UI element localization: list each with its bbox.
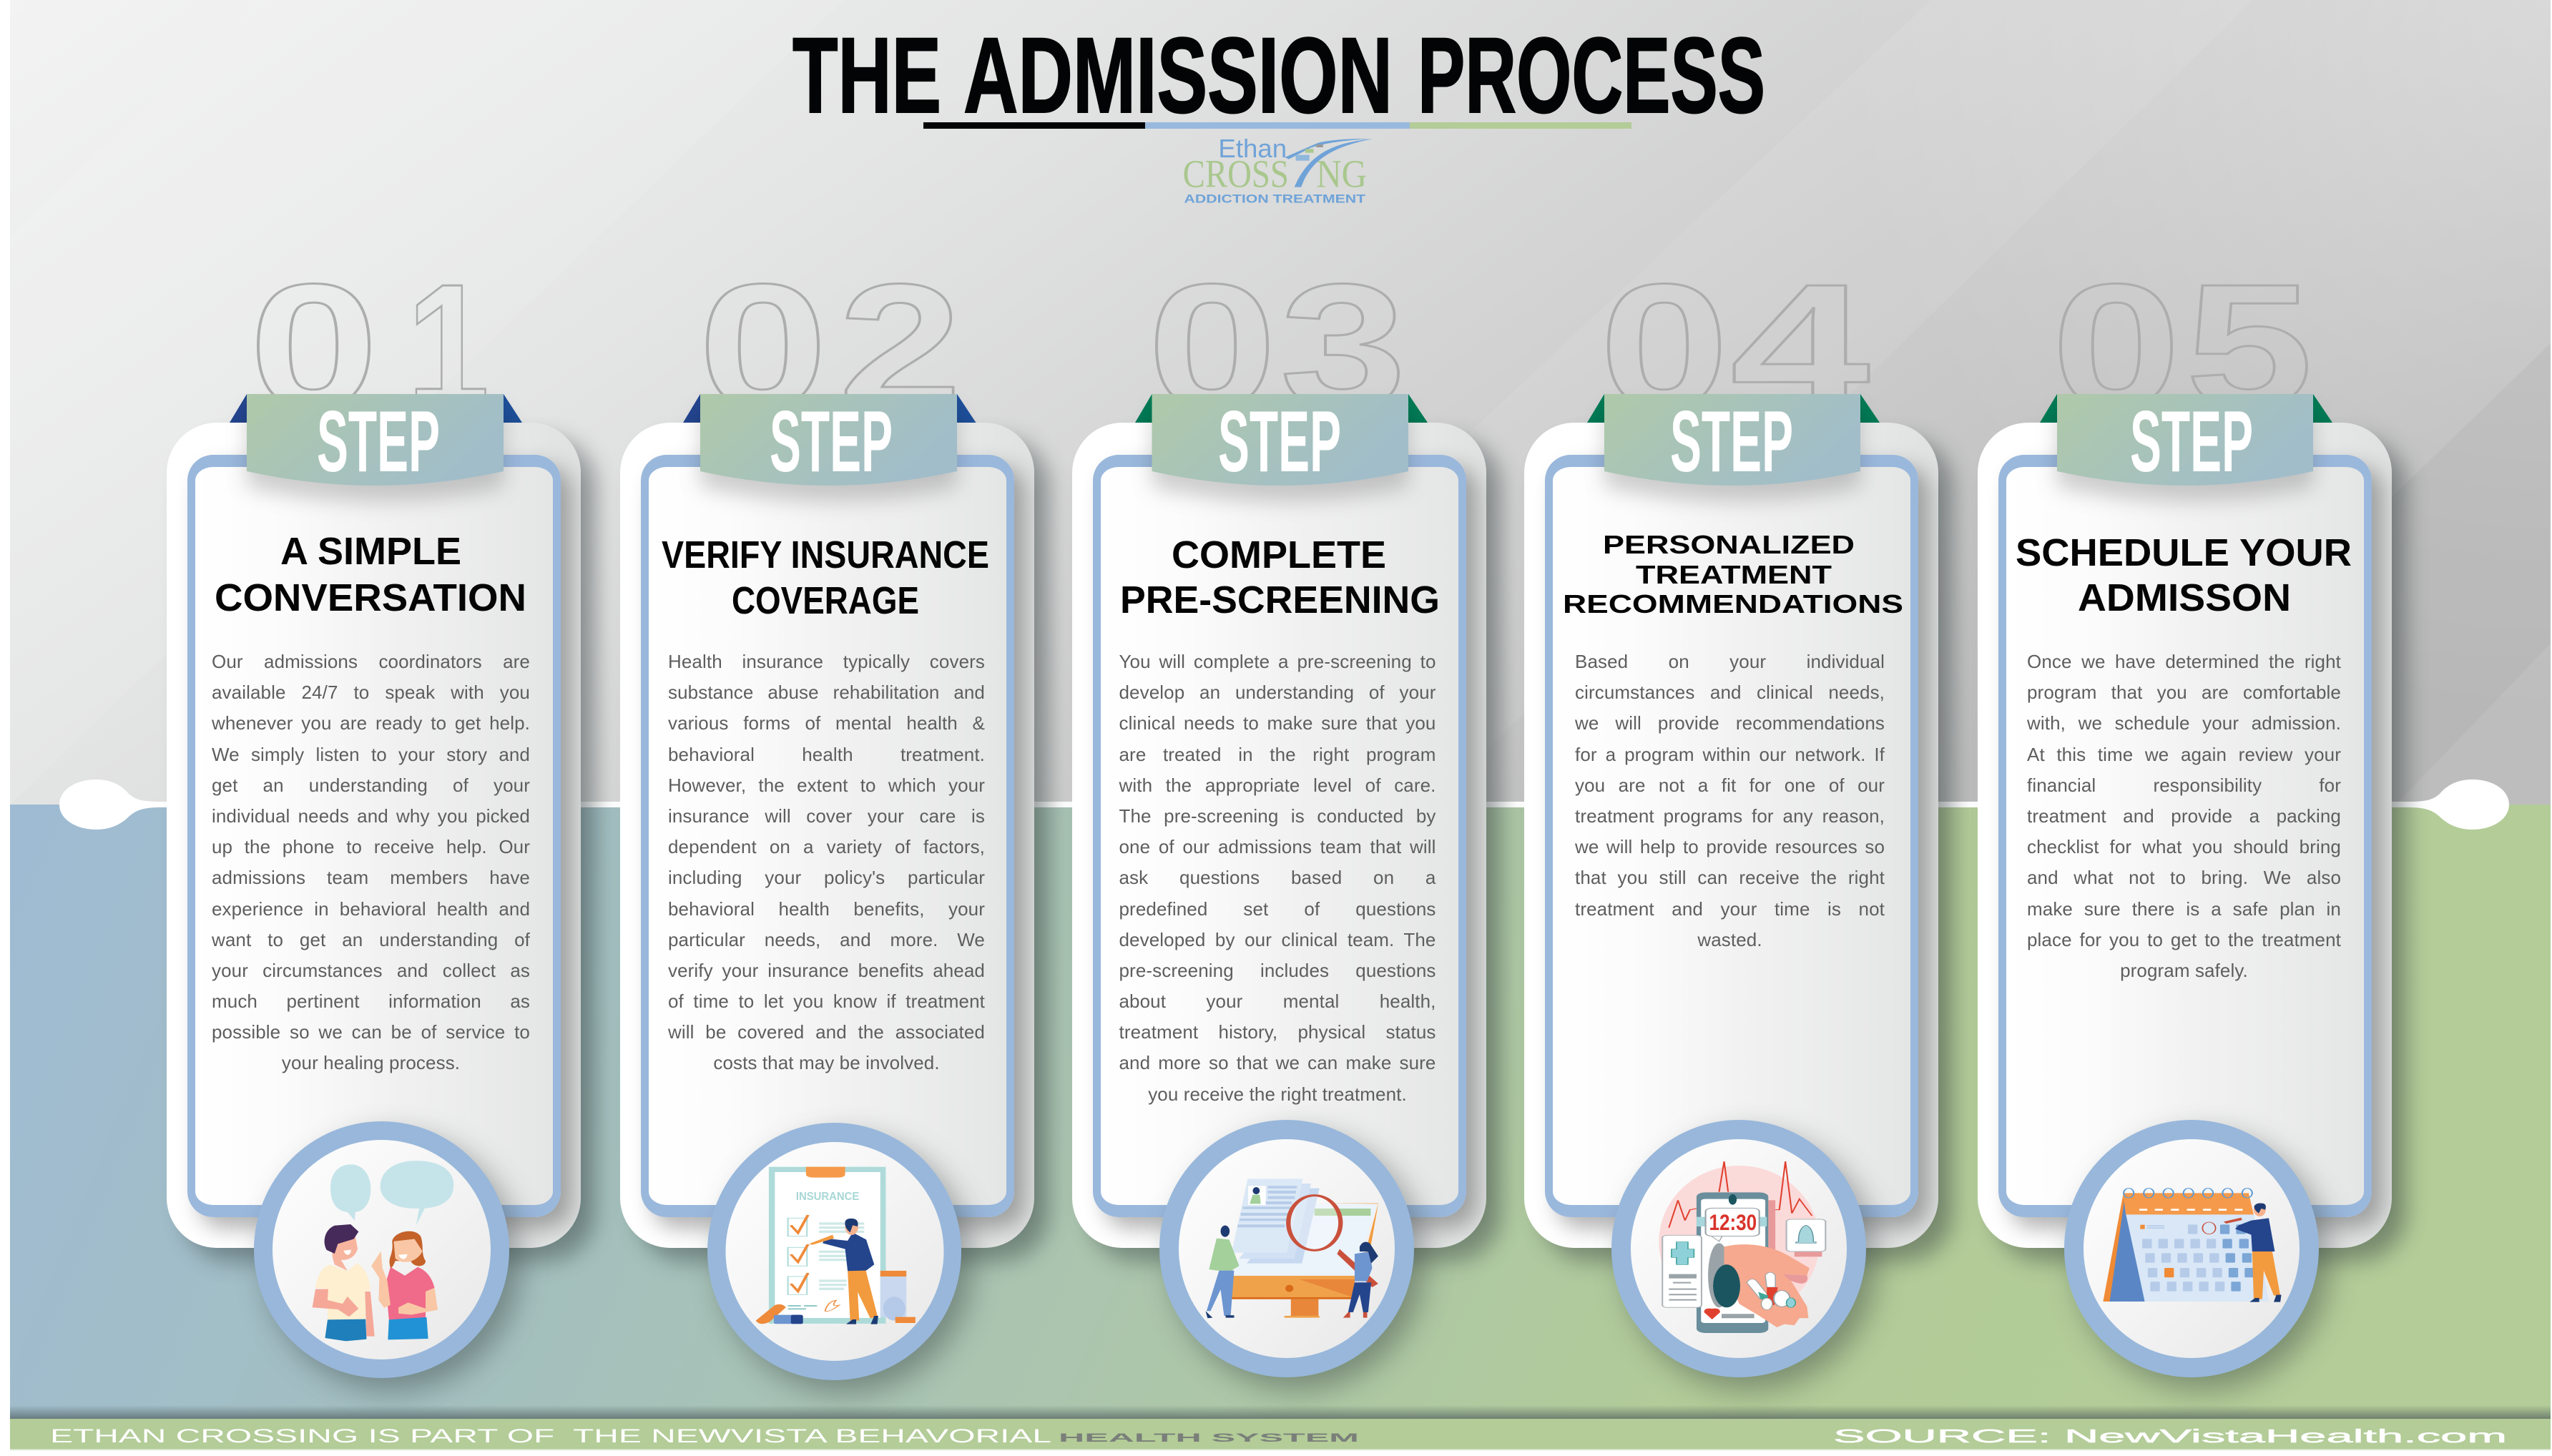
body text: verify your insurance benefits ahead [668, 960, 985, 981]
body text: your circumstances and collect as [212, 960, 530, 981]
ribbon, heading and illustration: COVERAGE [732, 579, 919, 622]
body text: various forms of mental health & [668, 712, 985, 734]
body text: individual needs and why you picked [212, 805, 530, 827]
ribbon, heading and illustration: SCHEDULE YOUR [2016, 531, 2352, 574]
panel: step 2 [620, 247, 1063, 1407]
ribbon, heading and illustration: STEP [1670, 393, 1793, 490]
title [792, 15, 1765, 135]
body text: financial responsibility for [2027, 774, 2341, 796]
footer bar [0, 1419, 2552, 1456]
ribbon, heading and illustration: CONVERSATION [215, 576, 526, 619]
ribbon, heading and illustration: RECOMMENDATIONS [1563, 589, 1903, 619]
body text: treatment and provide a packing [2027, 805, 2341, 827]
ribbon, heading and illustration: PERSONALIZED [1603, 530, 1855, 559]
large outlined number 04 with ribbon wings: 0 [1599, 247, 1729, 445]
large outlined number 03 with ribbon wings: 3 [1280, 247, 1407, 445]
card with blue frame [167, 423, 581, 1248]
body text: place for you to get to the treatment [2027, 929, 2341, 950]
body text [668, 651, 985, 1073]
body text: However, the extent to which your [668, 774, 985, 796]
title underline tricolour [923, 122, 1631, 129]
title: THE [792, 15, 941, 135]
ribbon, heading and illustration: COMPLETE [1172, 533, 1386, 576]
body text: pre-screening includes questions [1119, 960, 1436, 981]
body text: developed by our clinical team. The [1119, 929, 1436, 950]
body text: ask questions based on a [1119, 867, 1436, 888]
large outlined number 03 with ribbon wings [1135, 247, 1428, 445]
title: ADMISSION [963, 15, 1393, 135]
body text: whenever you are ready to get help. [212, 712, 530, 734]
body text: predefined set of questions [1119, 898, 1436, 920]
ribbon, heading and illustration: STEP [2130, 393, 2253, 490]
body text: Based on your individual [1575, 651, 1885, 672]
body text: with the appropriate level of care. [1119, 774, 1436, 796]
panel: step 1 [167, 247, 609, 1406]
body text: develop an understanding of your [1119, 682, 1436, 703]
footer bar: SOURCE: NewVistaHealth.com [1833, 1425, 2507, 1447]
body text: You will complete a pre-screening to [1119, 651, 1436, 672]
body text: behavioral health treatment. [668, 744, 985, 765]
body text: are treated in the right program [1119, 744, 1436, 765]
large outlined number 02 with ribbon wings: 0 [698, 247, 828, 445]
panel: step 5 [1978, 272, 2392, 1387]
body text: program that you are comfortable [2027, 682, 2341, 703]
card with blue frame [1524, 423, 1938, 1248]
ribbon, heading and illustration [662, 393, 989, 1407]
ribbon, heading and illustration: INSURANCE [796, 1189, 859, 1203]
body text: Our admissions coordinators are [212, 651, 530, 672]
body text: The pre-screening is conducted by [1119, 805, 1436, 827]
body text: treatment history, physical status [1119, 1021, 1436, 1043]
body text [1119, 651, 1436, 1105]
large outlined number 02 with ribbon wings [683, 247, 976, 445]
footer bar: ETHAN CROSSING IS PART OF THE NEWVISTA BEHAVORIAL [50, 1425, 1051, 1447]
body text: particular needs, and more. We [668, 929, 985, 950]
large outlined number 04 with ribbon wings [1587, 247, 1880, 445]
body text: program safely. [2120, 960, 2248, 981]
body text: behavioral health benefits, your [668, 898, 985, 920]
body text: one of our admissions team that will [1119, 836, 1436, 857]
body text: your healing process. [282, 1052, 460, 1073]
body text: and more so that we can make sure [1119, 1052, 1436, 1073]
body text: about your mental health, [1119, 990, 1436, 1012]
logo: Ethan Crossing Addiction Treatment [1183, 134, 1372, 205]
large outlined number 02 with ribbon wings: 2 [838, 247, 962, 445]
title: PROCESS [1418, 15, 1765, 135]
body text: and what not to bring. We also [2027, 867, 2341, 888]
body text: admissions team members have [212, 867, 530, 888]
panel: step 4 [1524, 247, 1967, 1405]
body text: treatment programs for any reason, [1575, 805, 1885, 827]
body text: up the phone to receive help. Our [212, 836, 530, 857]
ribbon, heading and illustration: STEP [770, 393, 893, 490]
body text: much pertinent information as [212, 990, 530, 1012]
ribbon, heading and illustration: 12:30 [1709, 1210, 1757, 1235]
body text: Once we have determined the right [2027, 651, 2341, 672]
body text: experience in behavioral health and [212, 898, 530, 920]
body text [2027, 646, 2341, 986]
body text: with, we schedule your admission. [2027, 712, 2341, 734]
card with blue frame [1978, 423, 2392, 1248]
panel: step 3 [1072, 247, 1515, 1405]
body text: Health insurance typically covers [668, 651, 985, 672]
body text: possible so we can be of service to [212, 1021, 530, 1043]
large outlined number 05 with ribbon wings: 5 [2185, 247, 2313, 445]
body text: dependent on a variety of factors, [668, 836, 985, 857]
body text [212, 651, 530, 1073]
body text: checklist for what you should bring [2027, 836, 2341, 857]
body text: treatment and your time is not [1575, 898, 1885, 920]
ribbon, heading and illustration: STEP [317, 393, 440, 490]
card with blue frame [1072, 423, 1486, 1248]
body text: clinical needs to make sure that you [1119, 712, 1436, 734]
body text: you receive the right treatment. [1148, 1083, 1407, 1105]
large outlined number 05 with ribbon wings [1949, 272, 2435, 1416]
ribbon, heading and illustration: TREATMENT [1636, 560, 1832, 589]
body text: you are not a fit for one of our [1575, 774, 1885, 796]
body text: we will provide recommendations [1575, 712, 1885, 734]
body text: that you still can receive the right [1575, 867, 1885, 888]
large outlined number 03 with ribbon wings: 0 [1147, 247, 1277, 445]
body text: insurance will cover your care is [668, 805, 985, 827]
card with blue frame [620, 423, 1034, 1248]
footer bar: HEALTH SYSTEM [1059, 1431, 1359, 1445]
body text: substance abuse rehabilitation and [668, 682, 985, 703]
body text: We simply listen to your story and [212, 744, 530, 765]
large outlined number 04 with ribbon wings: 4 [1730, 247, 1872, 445]
body text: we will help to provide resources so [1575, 836, 1885, 857]
ribbon, heading and illustration [1120, 393, 1441, 1405]
ribbon, heading and illustration: ADMISSON [2078, 576, 2291, 619]
large outlined number 01 with ribbon wings: 0 [249, 247, 378, 445]
body text: make sure there is a safe plan in [2027, 898, 2341, 920]
ribbon, heading and illustration: A SIMPLE [280, 530, 461, 573]
body text: of time to let you know if treatment [668, 990, 985, 1012]
ribbon, heading and illustration [1949, 272, 2435, 1416]
body text: costs that may be involved. [713, 1052, 940, 1073]
large outlined number 01 with ribbon wings [230, 247, 522, 445]
ribbon, heading and illustration [1563, 393, 1903, 1405]
body text: circumstances and clinical needs, [1575, 682, 1885, 703]
large outlined number 01 with ribbon wings: 1 [407, 248, 489, 445]
ribbon, heading and illustration: PRE-SCREENING [1120, 579, 1440, 621]
body text: want to get an understanding of [212, 929, 530, 950]
body text: get an understanding of your [212, 774, 530, 796]
ribbon, heading and illustration: VERIFY INSURANCE [662, 533, 989, 576]
ribbon, heading and illustration [215, 393, 536, 1406]
body text [1575, 646, 1885, 955]
body text: available 24/7 to speak with you [212, 682, 530, 703]
body text: At this time we again review your [2027, 744, 2341, 765]
body text: will be covered and the associated [668, 1021, 985, 1043]
body text: wasted. [1697, 929, 1762, 950]
ribbon, heading and illustration: STEP [1218, 393, 1341, 490]
body text: including your policy's particular [668, 867, 985, 888]
body text: for a program within our network. If [1575, 744, 1885, 765]
large outlined number 05 with ribbon wings: 0 [2051, 247, 2181, 445]
